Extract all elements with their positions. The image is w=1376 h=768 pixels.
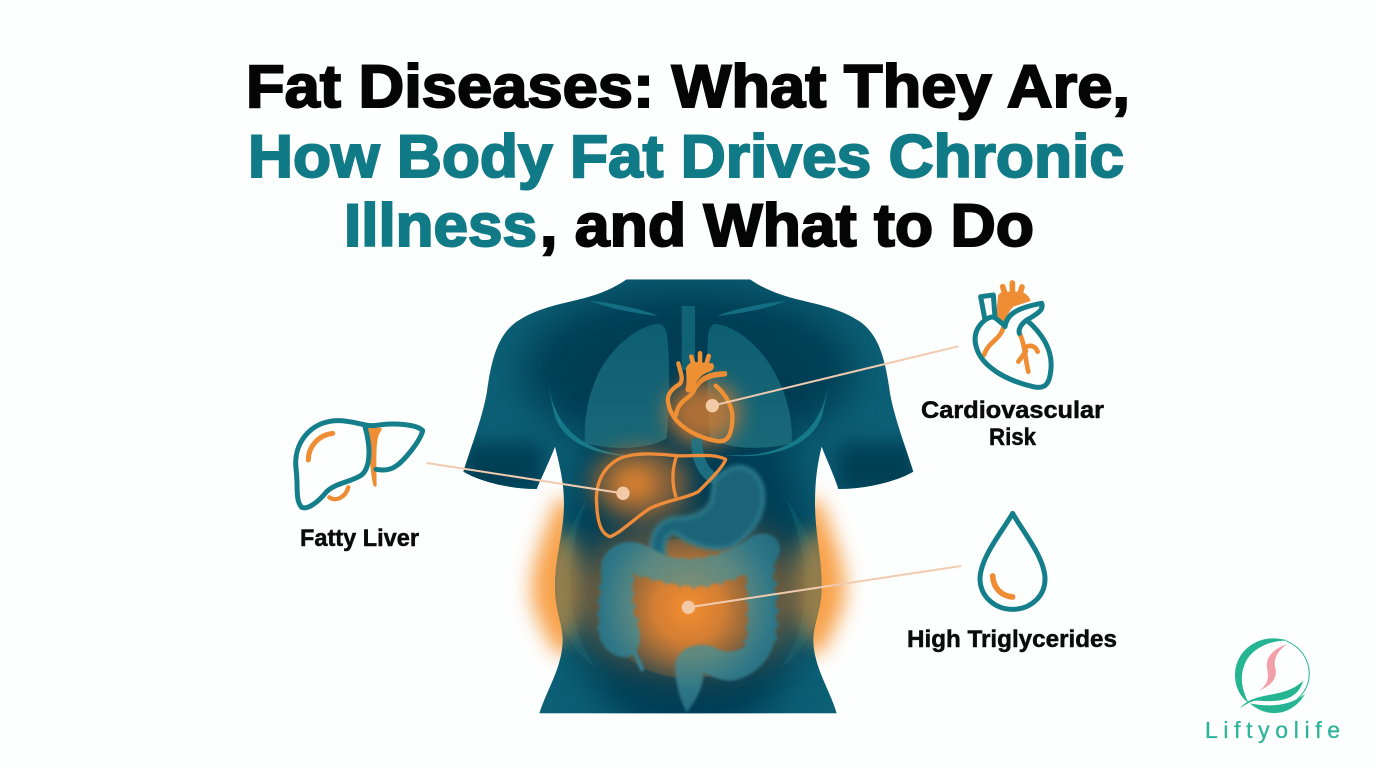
waist orange bleed bbox=[535, 530, 582, 643]
callout dots bbox=[616, 399, 719, 614]
label: Cardiovascular Risk bbox=[921, 397, 1104, 451]
logo: Liftyolife: Liftyolife bbox=[1205, 717, 1340, 743]
title bbox=[246, 53, 1130, 259]
icon: liver bbox=[296, 421, 423, 508]
belly glow centre bbox=[626, 538, 749, 678]
appendix bbox=[634, 652, 642, 669]
clavicle highlights bbox=[590, 301, 787, 316]
liver glow bbox=[590, 447, 690, 520]
label: Cardiovascular Risk: Cardiovascular bbox=[921, 397, 1104, 424]
lower torso arcs bbox=[568, 502, 594, 666]
stomach bbox=[651, 467, 763, 555]
heart glow bbox=[667, 382, 740, 445]
icon: heart bbox=[975, 283, 1051, 387]
title: Fat Diseases: What They Are, bbox=[246, 53, 1130, 120]
large intestine bbox=[599, 533, 780, 713]
trachea bbox=[682, 306, 695, 370]
esophagus bbox=[697, 438, 717, 480]
orange abdomen glow bbox=[573, 527, 807, 667]
title: Illness bbox=[344, 192, 537, 259]
logo: Liftyolife bbox=[1205, 638, 1340, 743]
liver outline bbox=[596, 454, 726, 537]
lungs bbox=[585, 324, 669, 448]
callout line: belly bbox=[688, 566, 961, 607]
heart outline bbox=[668, 353, 732, 441]
icon: drop bbox=[980, 513, 1045, 609]
chest crescents bbox=[549, 388, 647, 456]
title: , and What to Do bbox=[540, 192, 1034, 259]
torso bbox=[463, 279, 914, 714]
label: High Triglycerides: High Triglycerides bbox=[907, 626, 1117, 653]
callout line: heart bbox=[713, 346, 958, 406]
callout line: liver bbox=[427, 463, 623, 493]
side fat glow bbox=[532, 500, 845, 653]
title: How Body Fat Drives Chronic bbox=[248, 123, 1124, 190]
body illustration bbox=[427, 270, 961, 750]
label: Cardiovascular Risk: Risk bbox=[989, 424, 1037, 451]
label: Fatty Liver: Fatty Liver bbox=[300, 525, 419, 552]
